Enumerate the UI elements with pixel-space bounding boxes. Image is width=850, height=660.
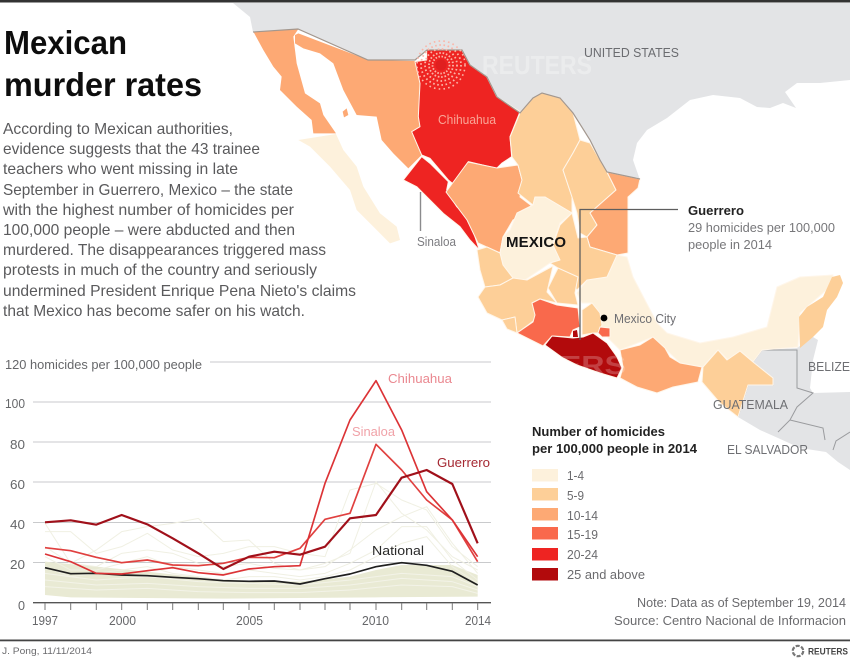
state: Durango [446,162,537,253]
icon: Reuters logo [793,646,848,656]
note and source: Source: Centro Nacional de Informacion [614,613,846,628]
x axis labels: 2010 [362,613,389,628]
intro text: teachers who went missing in late [3,161,238,178]
gridlines [33,362,491,562]
series label: Guerrero: Guerrero [437,455,490,470]
intro text: evidence suggests that the 43 trainee [3,141,260,158]
land: Guatemala, Belize and Central America [738,337,850,470]
y axis labels [5,357,202,613]
gulf island [343,108,348,117]
legend labels: 15-19 [567,527,598,542]
marker: Mexico City [601,315,607,321]
callout: Guerrero: Guerrero [688,204,744,218]
callout: Guerrero [688,204,835,252]
legend labels: 10-14 [567,508,598,523]
state: Baja California [253,29,336,133]
state: Nayarit [477,247,513,287]
callout: Guerrero: people in 2014 [688,237,772,252]
watermark: Reuters dot logo [417,41,465,89]
note and source [614,595,846,628]
leader line: Guerrero [580,210,678,340]
state: Guanajuato [548,268,578,305]
label: Guatemala: GUATEMALA [713,397,788,412]
state: Mexico [582,303,602,335]
title: murder rates [4,66,202,103]
label: El Salvador: EL SALVADOR [727,442,808,457]
state: Zacatecas and Aguascalientes [500,197,572,280]
line chart [5,357,491,628]
state: Sonora [295,33,422,168]
northwest states [253,29,520,250]
title [4,24,202,103]
icon: Reuters logo: REUTERS [808,646,848,656]
intro text: September in Guerrero, Mexico – the state [3,182,293,199]
intro text: protests in much of the country and seriously [3,262,317,279]
state: Colima [502,317,517,333]
title: Mexican [4,24,127,61]
land: United States [233,3,850,180]
state: Sinaloa [403,157,479,250]
state: Quintana Roo [799,275,843,348]
legend labels: 25 and above [567,567,645,582]
lines: other states [45,482,478,599]
note and source: Note: Data as of September 19, 2014 [637,595,846,610]
label: Chihuahua: Chihuahua [438,113,496,127]
rule: top [0,0,850,2]
legend title: Number of homicides [532,425,665,439]
callout: Guerrero: 29 homicides per 100,000 [688,220,835,235]
x axis labels: 2014 [465,613,491,628]
intro text: According to Mexican authorities, [3,121,233,138]
map [233,3,850,470]
series label: National: National [372,543,424,558]
line: Guerrero [45,470,478,569]
legend labels: 20-24 [567,547,598,562]
y axis labels: 0 [18,598,25,613]
state: Oaxaca [620,337,702,393]
y axis labels: 80 [10,437,25,452]
line: Sinaloa [45,444,478,566]
state: Chihuahua [412,50,520,187]
y axis labels: 60 [10,477,25,492]
rule: bottom [0,640,850,641]
state: Baja California Sur [298,134,400,243]
series label: Chihuahua: Chihuahua [388,371,453,386]
intro text: murdered. The disappearances triggered mass [3,242,326,259]
legend labels [567,468,645,582]
y axis labels: 100 [5,396,25,411]
state: Jalisco [478,266,557,333]
intro text: undermined President Enrique Pena Nieto's claims [3,283,356,300]
legend labels: 1-4 [567,468,584,483]
watermark: Reuters text: REUTERS [482,50,592,80]
x axis labels: 2005 [236,613,263,628]
label: Sinaloa: Sinaloa [417,235,456,249]
intro text: 100,000 people – were abducted and then [3,222,295,239]
x axis labels: 1997 [32,613,58,628]
label: Mexico City: Mexico City [614,312,677,326]
line: National [45,563,478,585]
y axis labels: 120 homicides per 100,000 people [5,357,202,372]
state: Coahuila [510,93,580,213]
credit: J. Pong, 11/11/2014 [2,646,92,657]
Mexico–US and Mexico–Guatemala borders [253,29,640,179]
legend title: per 100,000 people in 2014 [532,442,697,456]
legend swatches [532,469,558,580]
axis [33,603,491,610]
small dark state piece [573,330,578,337]
line: Chihuahua [45,381,478,575]
legend [532,425,697,582]
state: San Luis Potosi [550,213,617,290]
leader line: Sinaloa [420,192,422,231]
state: Michoacan [517,299,580,346]
series label: Sinaloa: Sinaloa [352,424,396,439]
label: United States: UNITED STATES [584,45,679,60]
state: Chiapas [702,350,773,417]
legend labels: 5-9 [567,488,584,503]
intro text [2,121,356,320]
state: Tamaulipas [587,172,640,255]
map labels [417,45,850,457]
state: Guerrero [545,333,622,378]
intro text: that Mexico has become safer on his watch. [3,303,305,320]
watermark: Reuters text over Guerrero: TERS [540,350,626,380]
x axis labels [32,613,491,628]
y axis labels: 40 [10,517,25,532]
label: Mexico: MEXICO [506,234,566,251]
intro text: with the highest number of homicides per [2,202,294,219]
state: Morelos [598,327,610,337]
central and southern states [446,93,843,417]
legend title [532,425,697,456]
x axis labels: 2000 [109,613,136,628]
y axis labels: 20 [10,557,25,572]
state: Nuevo Leon [563,140,616,237]
state: Veracruz, Hidalgo and the southeast (1-4) [577,255,833,367]
